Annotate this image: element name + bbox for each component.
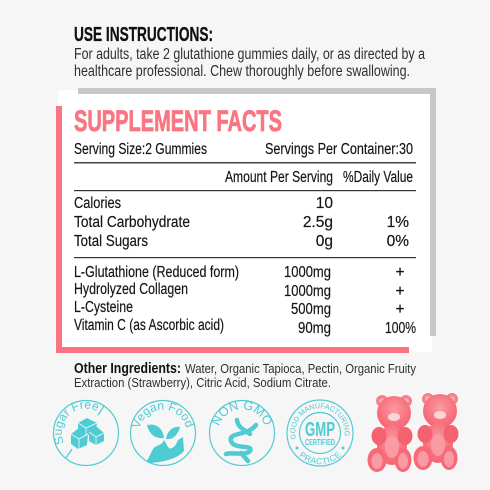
icon: gmp certified: CERTIFIED [305,438,335,447]
nutrition rows: 0g [316,233,333,250]
text block: use instructions: healthcare professional. Chew thoroughly before swallowing. [74,63,410,80]
panel: supplement facts [56,88,436,353]
serving info [74,141,413,158]
nutrition rows: 1% [387,214,409,231]
icon: gummy bears [368,393,458,472]
title: supplement facts: SUPPLEMENT FACTS [74,105,282,138]
ingredient rows: 100% [385,320,416,337]
icon: vegan food: Vegan Food [132,402,194,428]
icon: sugar free [52,400,120,466]
nutrition rows: 0% [387,233,409,250]
text block: use instructions [74,46,425,80]
ingredient rows: 500mg [291,301,331,318]
icon: gmp certified [286,399,354,467]
nutrition rows: 10 [316,195,333,212]
icon: non gmo [208,400,276,466]
ingredient rows [74,264,416,337]
nutrition rows: Total Sugars [74,233,148,250]
ingredient rows: + [395,283,405,300]
ingredient rows: Hydrolyzed Collagen [74,281,188,298]
nutrition rows: Total Carbohydrate [74,214,190,231]
column headers: Amount Per Serving [225,169,333,186]
nutrition rows [74,195,409,250]
nutrition rows: 2.5g [303,214,333,231]
ingredient rows: 1000mg [284,283,331,300]
ingredient rows: 90mg [298,320,331,337]
text block: other ingredients: Other Ingredients: [74,361,181,377]
ingredient rows: + [395,264,405,281]
icon: gmp certified: GMP [305,419,335,441]
panel frame [56,88,436,353]
icon: gmp certified: PRACTICE [300,452,342,464]
serving info: Servings Per Container:30 [265,141,413,158]
icon: sugar free: Sugar Free [54,402,98,444]
ingredient rows: L-Glutathione (Reduced form) [74,264,239,281]
text block: other ingredients: Extraction (Strawberry), Citric Acid, Sodium Citrate. [74,375,331,390]
serving info: Serving Size:2 Gummies [74,141,207,158]
text block: other ingredients: Water, Organic Tapioca, Pectin, Organic Fruity [185,361,417,376]
text block: other ingredients [74,361,417,390]
ingredient rows: L-Cysteine [74,299,133,316]
icon: non gmo: NON GMO [212,402,272,426]
icon: vegan food [130,400,196,466]
ingredient rows: + [395,301,405,318]
nutrition rows: Calories [74,195,121,212]
icon: gmp certified: GOOD MANUFACTURING [290,403,350,440]
ingredient rows: 1000mg [284,264,331,281]
ingredient rows: Vitamin C (as Ascorbic acid) [74,317,224,334]
heading: use instructions: USE INSTRUCTIONS: [74,24,213,46]
column headers: %Daily Value [343,169,413,186]
